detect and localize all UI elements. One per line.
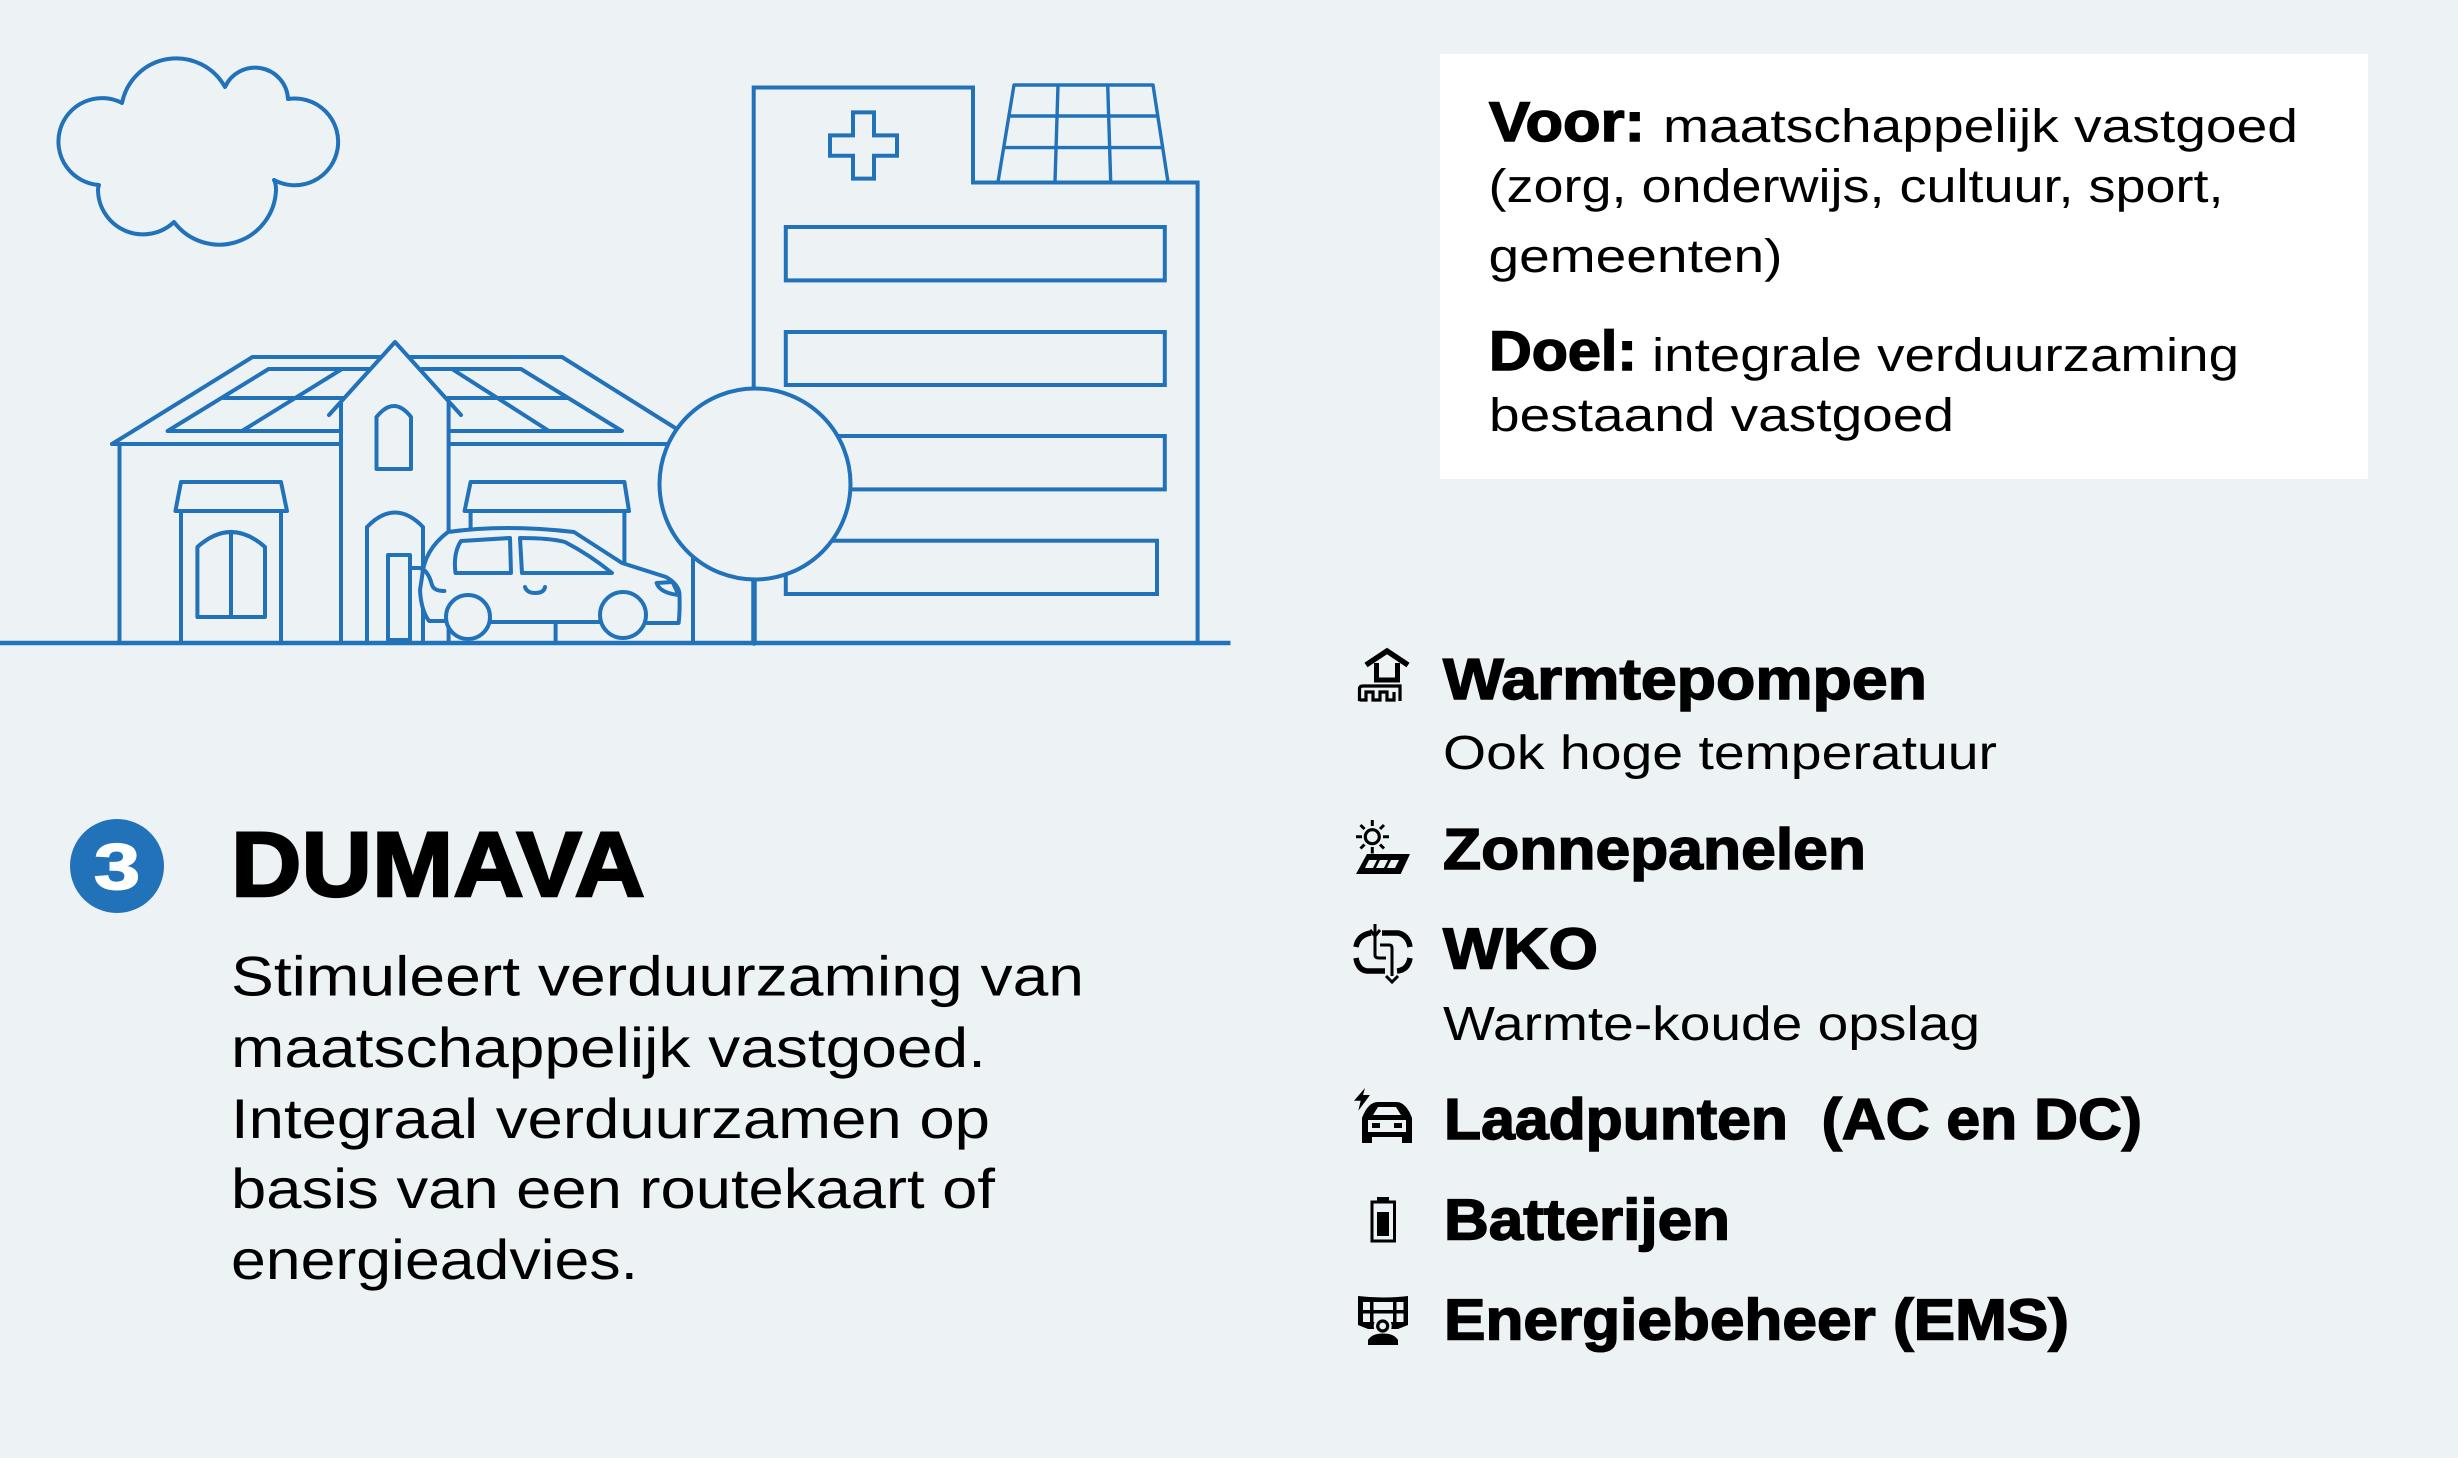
icon: heat pump house bbox=[1360, 651, 1408, 701]
icon: heat cold storage bbox=[1356, 924, 1410, 982]
text: doel: Doel: bbox=[1489, 319, 1637, 382]
list item: batterijen: Batterijen bbox=[1444, 1188, 1730, 1252]
text: description bbox=[231, 944, 1084, 1291]
right garage with canopy bbox=[465, 482, 629, 570]
icon: medical cross bbox=[830, 112, 897, 179]
text: voor: Voor: bbox=[1489, 90, 1645, 153]
illustration: round tree bbox=[660, 388, 850, 643]
text: doel: integrale verduurzaming bbox=[1652, 328, 2239, 381]
list item: warmtepompen: Warmtepompen bbox=[1443, 647, 1927, 712]
list item: laadpunten: Laadpunten (AC en DC) bbox=[1444, 1087, 2142, 1152]
title: DUMAVA bbox=[231, 814, 645, 916]
list item: zonnepanelen: Zonnepanelen bbox=[1443, 817, 1866, 882]
text: description: Integraal verduurzamen op bbox=[231, 1087, 990, 1150]
text: description: Stimuleert verduurzaming van bbox=[231, 944, 1084, 1008]
roof solar panels bbox=[168, 369, 622, 431]
list item: wko bbox=[1443, 916, 1980, 1051]
illustration: house bbox=[112, 342, 693, 643]
text: description: energieadvies. bbox=[231, 1228, 638, 1291]
icon: energy management bbox=[1358, 1296, 1408, 1345]
text: description: maatschappelijk vastgoed. bbox=[231, 1016, 986, 1079]
icon: battery bbox=[1372, 1197, 1394, 1241]
list item: wko: WKO bbox=[1443, 916, 1598, 982]
text: voor: maatschappelijk vastgoed bbox=[1663, 99, 2298, 152]
left window with canopy bbox=[175, 482, 287, 643]
icon: cloud bbox=[58, 58, 338, 245]
text: doel bbox=[1489, 319, 2239, 441]
icon: charging car bbox=[1354, 1088, 1412, 1143]
text: voor bbox=[1488, 90, 2298, 282]
illustration: hospital building bbox=[754, 85, 1198, 643]
rooftop solar panel bbox=[998, 85, 1168, 182]
list item: wko: Warmte-koude opslag bbox=[1443, 998, 1980, 1051]
text: voor: gemeenten) bbox=[1488, 229, 1782, 282]
panel: voor en doel bbox=[1440, 54, 2368, 479]
icon: sun and solar panel bbox=[1356, 820, 1410, 874]
illustration: electric car bbox=[411, 528, 680, 639]
icon: number 3 badge bbox=[70, 819, 164, 913]
list item: warmtepompen: Ook hoge temperatuur bbox=[1443, 727, 1997, 780]
list item: warmtepompen bbox=[1443, 647, 1997, 780]
icon: number 3 badge: 3 bbox=[94, 830, 140, 903]
front door bbox=[367, 512, 423, 643]
tower with gable bbox=[329, 342, 461, 643]
list item: energiebeheer: Energiebeheer (EMS) bbox=[1444, 1288, 2069, 1352]
text: doel: bestaand vastgoed bbox=[1489, 388, 1954, 441]
text: voor: (zorg, onderwijs, cultuur, sport, bbox=[1488, 159, 2224, 212]
text: description: basis van een routekaart of bbox=[231, 1157, 995, 1220]
ground line bbox=[0, 641, 1230, 645]
